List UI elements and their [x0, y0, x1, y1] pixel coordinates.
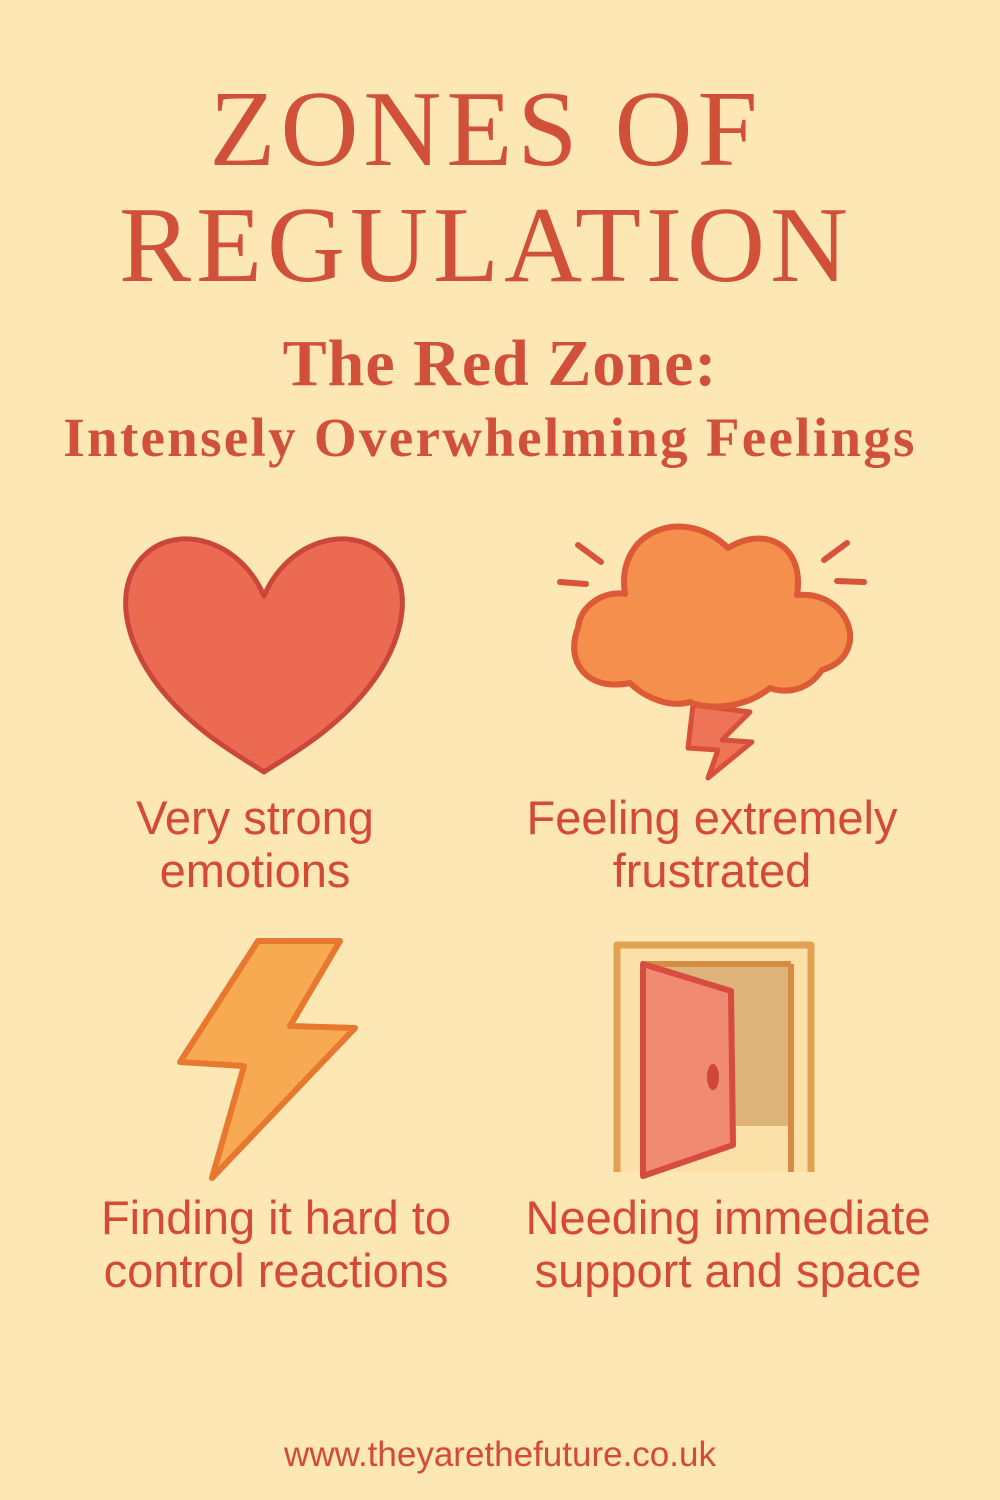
title	[119, 70, 853, 305]
label: feeling extremely frustrated	[527, 791, 898, 897]
label: feeling extremely frustrated: frustrated	[613, 844, 811, 897]
label: very strong emotions: emotions	[160, 844, 350, 897]
label: needing immediate support and space	[526, 1191, 930, 1297]
label: finding it hard to control reactions	[101, 1191, 451, 1297]
label: very strong emotions	[136, 791, 374, 897]
label: very strong emotions: Very strong	[136, 791, 374, 844]
label: needing immediate support and space: Needing immediate	[526, 1191, 930, 1244]
label: feeling extremely frustrated: Feeling extremely	[527, 791, 897, 844]
subtitle line 2: Intensely Overwhelming Feelings	[63, 407, 917, 468]
title: REGULATION	[119, 186, 853, 305]
label: finding it hard to control reactions: Finding it hard to	[101, 1191, 451, 1244]
subtitle: The Red Zone:	[283, 327, 717, 400]
label: needing immediate support and space: support and space	[535, 1244, 921, 1297]
footer url: www.theyarethefuture.co.uk	[284, 1435, 716, 1474]
label: finding it hard to control reactions: control reactions	[104, 1244, 448, 1297]
title: ZONES OF	[209, 70, 763, 189]
